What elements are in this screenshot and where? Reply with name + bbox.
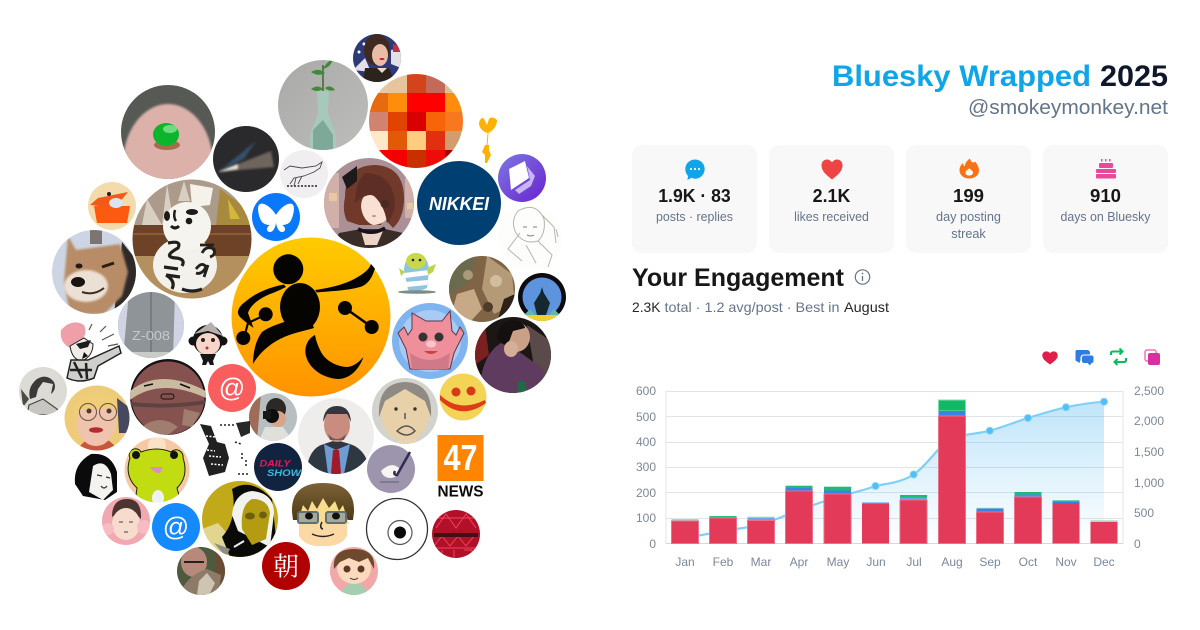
month labels: Jan xyxy=(675,555,695,569)
avatar: pixelated mosaic xyxy=(369,74,464,169)
avatar: blue at-sign xyxy=(152,503,200,551)
icon: legend reposts xyxy=(1111,348,1126,365)
avatar: Asahi red kanji xyxy=(262,542,310,590)
bar: Sep xyxy=(976,508,1004,544)
avatar: rocky ground xyxy=(449,256,515,322)
avatar: 47 News logo xyxy=(438,435,484,500)
panel: day posting streak: 199 xyxy=(953,185,984,206)
left axis labels xyxy=(636,384,656,551)
avatar: 47 News logo: NEWS xyxy=(438,484,484,500)
icon: legend quotes xyxy=(1145,350,1160,365)
month labels: Jul xyxy=(906,555,922,569)
panel: day posting streak: day posting xyxy=(936,210,1001,224)
month labels: Oct xyxy=(1019,555,1038,569)
avatar: yellow circle with black brush-drawn figure xyxy=(232,238,390,396)
avatar: man with hand on cheek xyxy=(474,316,552,394)
month labels: Aug xyxy=(941,555,963,569)
icon: heart xyxy=(822,160,842,180)
avatar: man in suit and red tie xyxy=(298,398,374,474)
month labels: Feb xyxy=(713,555,734,569)
avatar: glasses-wearing Mii xyxy=(292,483,354,546)
engagement summary xyxy=(632,299,889,315)
panel: days on Bluesky: 910 xyxy=(1090,185,1121,206)
month labels: Jun xyxy=(866,555,886,569)
month labels: May xyxy=(827,555,849,569)
bar: Jul xyxy=(900,495,927,544)
panel: likes received: 2.1K xyxy=(813,185,851,206)
avatar: Nikkei logo: NIKKEI xyxy=(429,194,490,214)
bar: Dec xyxy=(1090,520,1118,544)
avatar: woman with US flag xyxy=(353,34,401,82)
title: Bluesky Wrapped xyxy=(832,60,1091,93)
avatar: black and white dog halftone xyxy=(200,421,250,476)
chart legend xyxy=(1042,348,1160,366)
avatar: striped bird xyxy=(393,246,441,294)
icon: legend replies xyxy=(1076,350,1094,366)
avatar: Nikkei logo xyxy=(417,161,501,245)
avatar: grey Z-008 building xyxy=(118,292,184,358)
icon: info xyxy=(855,270,870,284)
heading: Your Engagement: Your Engagement xyxy=(632,264,845,292)
avatar: orange pot xyxy=(88,182,136,230)
right axis labels: 2,500 xyxy=(1134,384,1164,398)
left axis labels: 500 xyxy=(636,410,656,424)
bar: Jan xyxy=(672,519,698,544)
avatar: bald man with cat xyxy=(177,547,225,595)
avatar: black and white manga girl xyxy=(75,454,117,500)
avatar: penguin on blue xyxy=(518,273,566,321)
right axis labels: 0 xyxy=(1134,537,1141,551)
avatar: cartoon monkey xyxy=(188,322,228,365)
user handle: @smokeymonkey.net xyxy=(968,96,1168,119)
panel: likes received xyxy=(769,145,894,253)
avatar: purple app logo xyxy=(498,154,546,202)
engagement summary: total · 1.2 avg/post · Best in xyxy=(664,299,840,315)
avatar: snowman sake bottle xyxy=(132,179,254,302)
avatar: bottle with plant xyxy=(278,59,368,150)
avatar: shiba dog xyxy=(52,230,138,314)
bar: Jun xyxy=(862,502,889,544)
line points xyxy=(872,398,1108,490)
month labels: Dec xyxy=(1093,555,1115,569)
bar: Aug xyxy=(938,400,966,544)
avatar: yellow woman portrait xyxy=(202,481,278,557)
avatar: pink pig mascot xyxy=(392,303,468,379)
left axis labels: 600 xyxy=(636,384,656,398)
avatar: red at-sign xyxy=(208,364,256,412)
avatar: 47 News logo: 47 xyxy=(444,437,478,478)
panel: day posting streak xyxy=(906,145,1031,253)
avatar: blue at-sign: @ xyxy=(163,512,189,542)
avatar: girl with pink flowers xyxy=(102,497,151,545)
month labels: Sep xyxy=(979,555,1001,569)
chart: monthly engagement xyxy=(636,384,1164,569)
cumulative area xyxy=(685,402,1104,544)
bar: Feb xyxy=(710,516,736,544)
avatar: yellow balloon figure xyxy=(479,117,497,163)
right axis labels: 2,000 xyxy=(1134,414,1164,428)
avatar: sketched cat xyxy=(280,150,328,198)
avatar: grey Z-008 building: Z-008 xyxy=(132,328,170,343)
bar: Nov xyxy=(1052,500,1080,544)
bar: Oct xyxy=(1014,492,1042,544)
chart grid xyxy=(666,391,1123,544)
left axis labels: 200 xyxy=(636,486,656,500)
avatar: red at-sign: @ xyxy=(219,372,245,402)
panel: likes received: likes received xyxy=(794,210,869,224)
panel: day posting streak: streak xyxy=(951,227,987,241)
avatar: hand drawn bearded man xyxy=(372,378,438,444)
bar: Mar xyxy=(748,517,774,544)
avatar: anime girl with brown hair xyxy=(324,158,414,248)
avatar: green frog xyxy=(124,436,190,506)
avatar: photographer with camera xyxy=(249,393,297,441)
panel: days on Bluesky: days on Bluesky xyxy=(1060,210,1151,224)
engagement summary: August xyxy=(844,299,889,315)
cumulative line xyxy=(685,402,1104,538)
icon: birthday cake xyxy=(1096,159,1116,178)
panel: posts and replies: 1.9K · 83 xyxy=(658,185,731,206)
avatar: blonde woman with glasses xyxy=(64,385,130,451)
avatar: smiling pizza xyxy=(440,374,486,420)
month labels xyxy=(675,555,1115,569)
panel: days on Bluesky xyxy=(1043,145,1168,253)
right axis labels: 1,500 xyxy=(1134,445,1164,459)
avatar: red neon sign xyxy=(432,510,480,558)
left axis labels: 0 xyxy=(649,537,656,551)
right axis labels xyxy=(1134,384,1164,551)
panel: posts and replies xyxy=(632,145,757,253)
avatar: pencil sketch of a girl xyxy=(498,205,562,269)
bar: May xyxy=(824,487,851,544)
stacked bars xyxy=(672,400,1118,544)
bar: Apr xyxy=(786,486,812,544)
left axis labels: 100 xyxy=(636,511,656,525)
panel: posts and replies: posts · replies xyxy=(656,210,733,224)
left axis labels: 300 xyxy=(636,460,656,474)
right axis labels: 1,000 xyxy=(1134,476,1164,490)
avatar: Asahi red kanji: 朝 xyxy=(273,546,299,584)
avatar: The Daily Show xyxy=(254,443,302,491)
icon: flame xyxy=(960,158,979,178)
avatar: pink-haired comic character xyxy=(61,322,121,381)
avatar: basketball xyxy=(130,359,206,435)
title: 2025 xyxy=(1100,60,1168,93)
avatar cluster xyxy=(19,34,566,595)
avatar: green gem on finger xyxy=(121,85,215,179)
icon: chat bubble xyxy=(685,159,705,180)
month labels: Nov xyxy=(1055,555,1077,569)
avatar: comet in night sky xyxy=(213,126,279,192)
avatar: Bluesky butterfly xyxy=(252,193,300,241)
avatar: eyeball in rings xyxy=(366,498,428,560)
month labels: Mar xyxy=(751,555,771,569)
avatar: The Daily Show: SHOW xyxy=(267,468,302,479)
right axis labels: 500 xyxy=(1134,506,1154,520)
avatar: The Daily Show: DAILY xyxy=(260,458,292,470)
avatar: cartoon boy xyxy=(330,547,378,595)
icon: legend likes xyxy=(1042,351,1058,364)
avatar: sketched woman xyxy=(19,367,67,415)
month labels: Apr xyxy=(790,555,808,569)
left axis labels: 400 xyxy=(636,435,656,449)
avatar: brush on lavender xyxy=(367,445,415,493)
engagement summary: 2.3K xyxy=(632,299,661,315)
